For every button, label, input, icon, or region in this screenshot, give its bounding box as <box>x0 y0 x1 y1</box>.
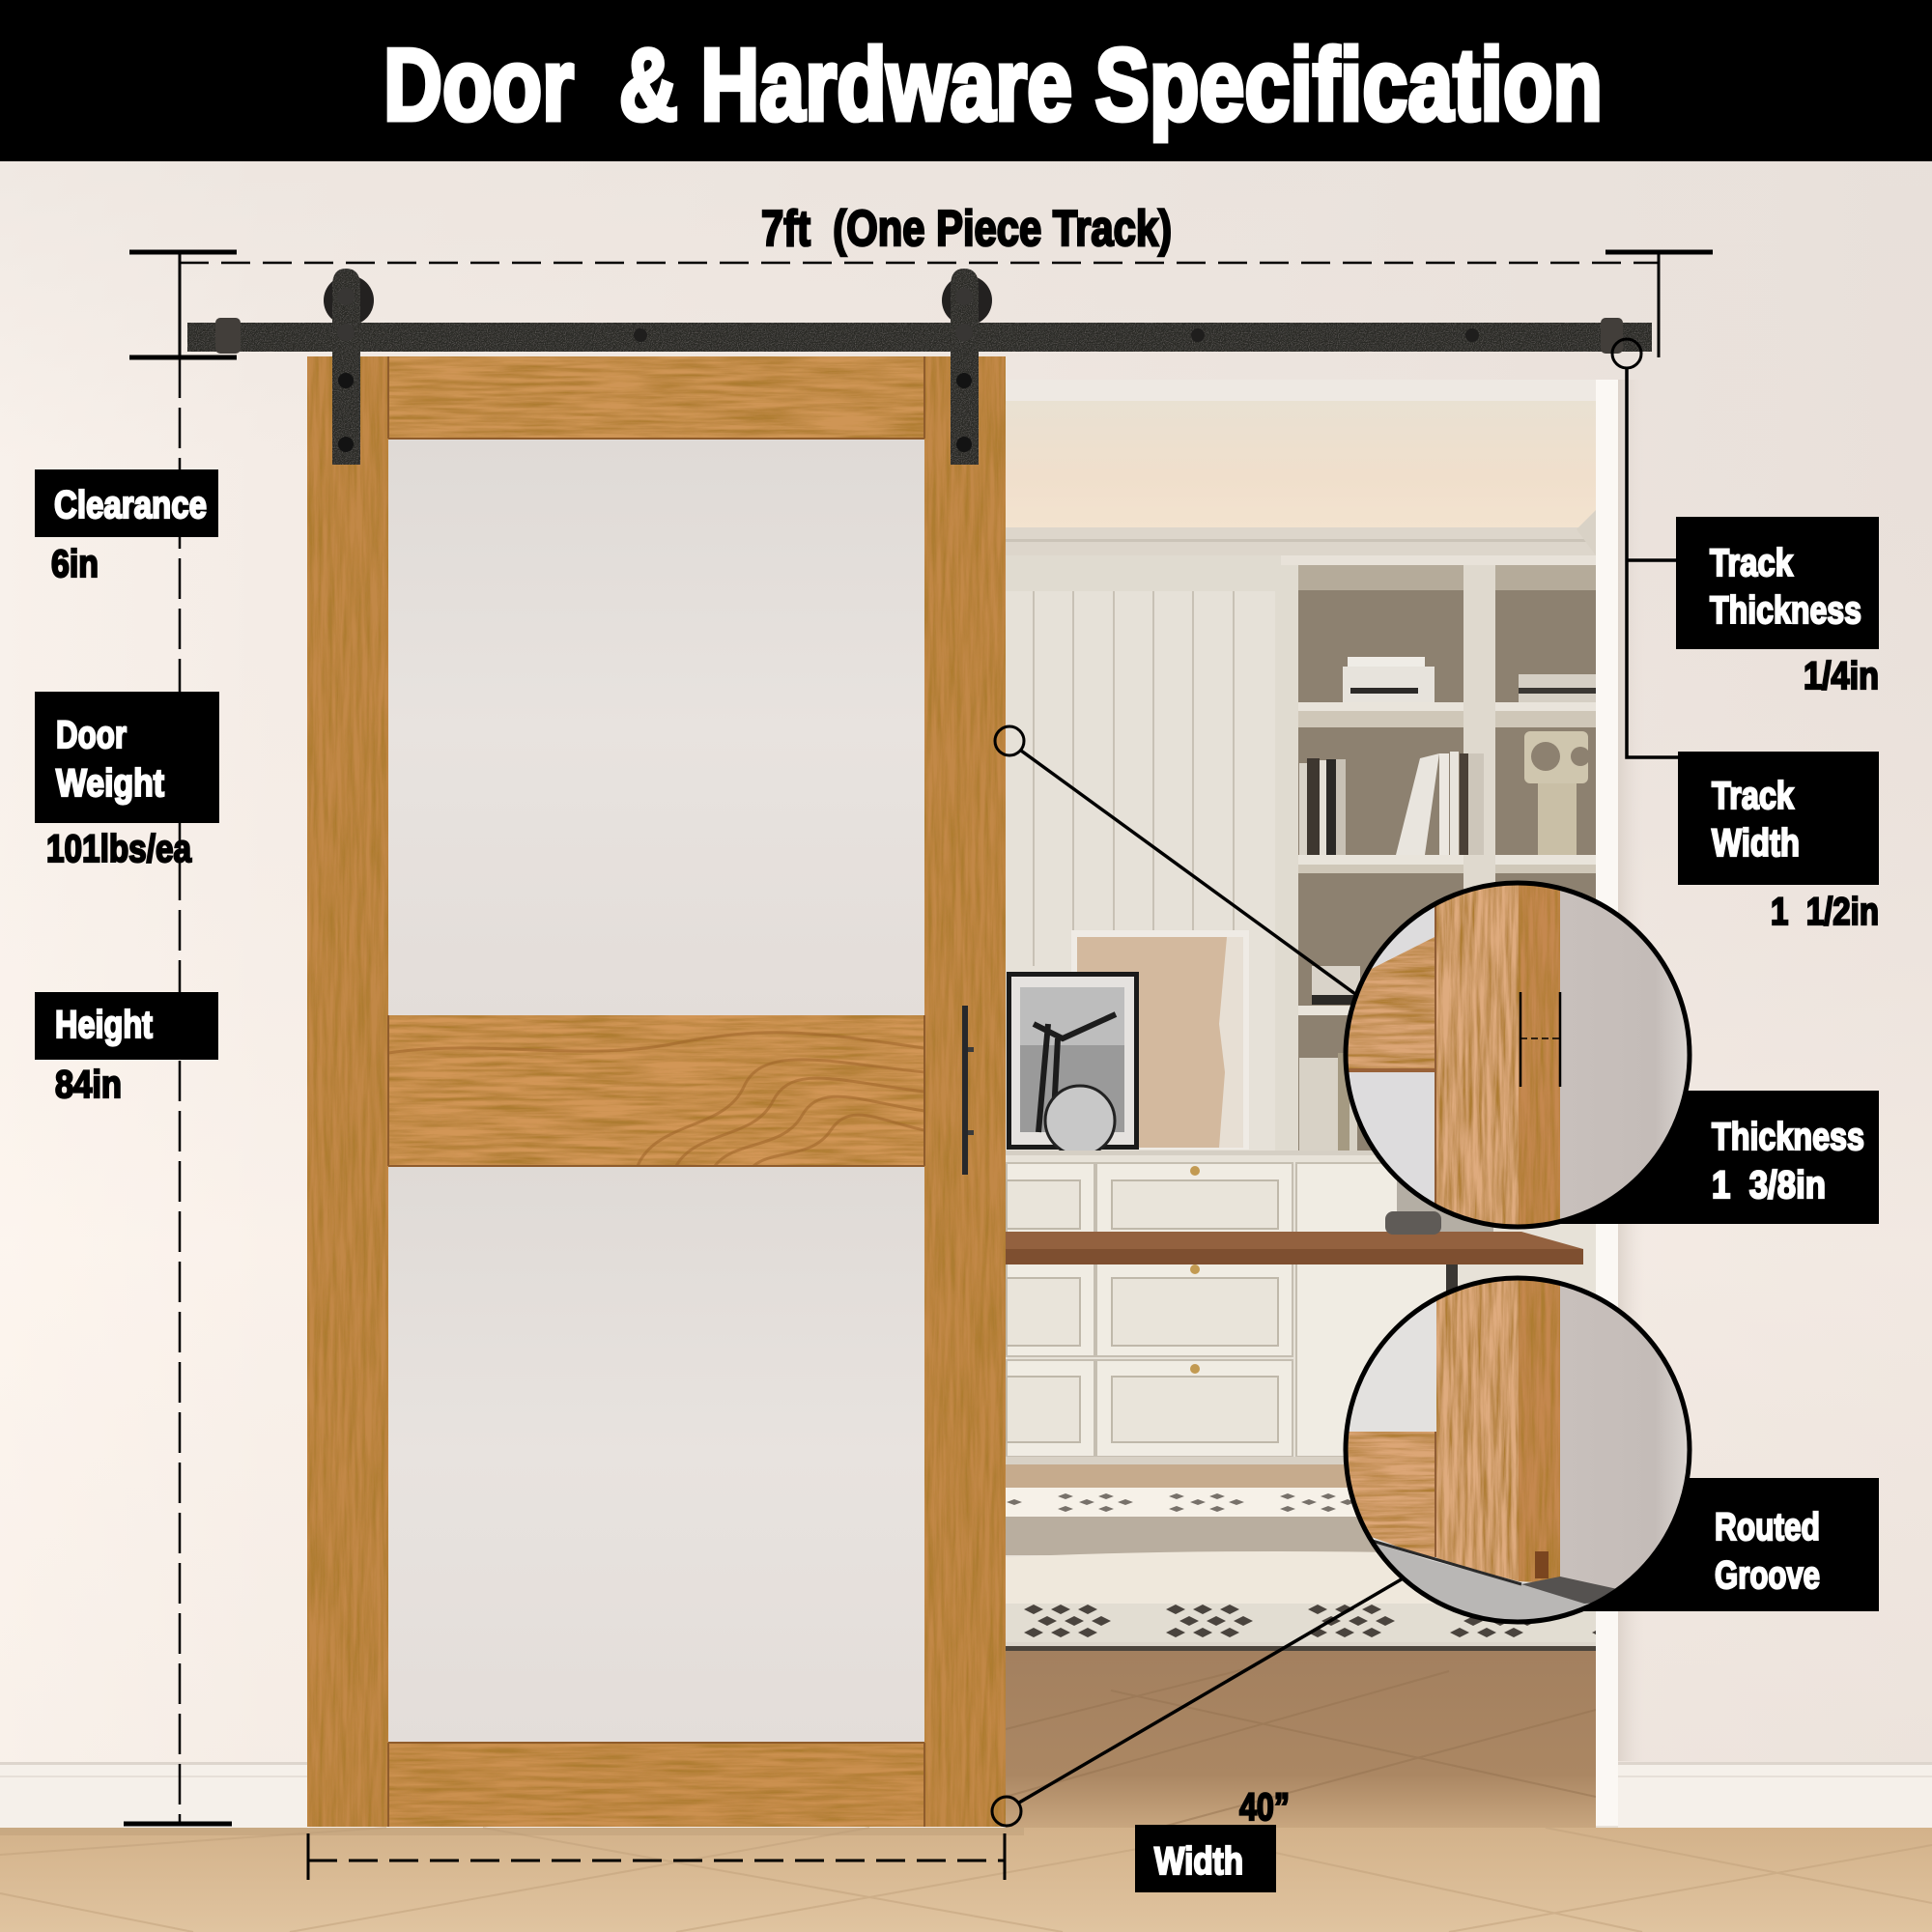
label: width: Width <box>1154 1840 1243 1883</box>
books <box>1299 657 1596 1151</box>
leader to thickness detail <box>995 726 1355 994</box>
label: routed groove: Groove <box>1715 1554 1820 1597</box>
label: door weight: Weight <box>56 762 164 805</box>
left hanger <box>324 269 374 465</box>
label: track width: Track <box>1712 775 1795 817</box>
label: thickness: Thickness <box>1712 1116 1864 1158</box>
label: track width: 1 1/2in <box>1771 891 1879 933</box>
label: track thickness: Thickness <box>1710 589 1861 632</box>
room seen through the opening <box>1006 380 1645 1828</box>
label: clearance: Clearance <box>54 484 207 526</box>
door stiles <box>307 356 1006 1827</box>
cathedral grain on middle rail <box>388 1033 924 1166</box>
label: clearance <box>35 469 218 585</box>
label: track thickness <box>1676 517 1879 697</box>
leader to groove detail <box>992 1577 1405 1826</box>
framed art: bicycle photo <box>1007 972 1139 1155</box>
label: routed groove: Routed <box>1715 1506 1820 1548</box>
label: door weight: Door <box>56 714 127 756</box>
crown molding <box>1006 510 1596 555</box>
label: door weight <box>35 692 219 870</box>
thickness marks <box>1520 992 1560 1087</box>
label: routed groove <box>1584 1478 1879 1611</box>
door opening trim <box>1006 380 1645 1826</box>
cabinets <box>1006 1151 1596 1464</box>
rug and interior floor <box>1006 1457 1596 1828</box>
magnifier: routed groove detail <box>1343 1275 1695 1633</box>
label: track width <box>1678 752 1879 933</box>
sculpture <box>1524 731 1590 855</box>
bookcase <box>1275 565 1596 1154</box>
height and clearance dimension line <box>124 252 232 1824</box>
track leader lines <box>1612 339 1678 757</box>
label: thickness: 1 3/8in <box>1712 1164 1826 1207</box>
label: track thickness: Track <box>1710 542 1794 584</box>
door rails <box>388 356 924 1827</box>
label: thickness <box>1557 1091 1879 1224</box>
wall panelling <box>1006 555 1281 1154</box>
barn door <box>307 356 1006 1827</box>
floor <box>0 1828 1932 1932</box>
width dimension line <box>308 1833 1005 1880</box>
desk <box>1006 1211 1583 1293</box>
pull handle <box>962 1006 974 1175</box>
label: width: 40” <box>1239 1786 1290 1829</box>
right hanger <box>942 269 992 465</box>
label: height: Height <box>55 1004 153 1046</box>
title bar <box>0 0 1932 161</box>
label: track thickness: 1/4in <box>1804 655 1879 697</box>
label: width <box>1135 1786 1290 1892</box>
framed art: watercolor <box>1071 930 1249 1150</box>
label: clearance: 6in <box>51 543 99 585</box>
label: track width: Width <box>1712 822 1800 865</box>
baseboards <box>0 1762 1932 1828</box>
title: Door & Hardware Specification <box>384 28 1603 142</box>
glass panels <box>386 439 927 1746</box>
label: height <box>35 992 218 1106</box>
label: height: 84in <box>55 1064 122 1106</box>
label: door weight: 101lbs/ea <box>46 828 192 870</box>
magnifier: door thickness detail <box>1343 879 1695 1232</box>
track rail <box>187 318 1652 354</box>
track length dimension: 7ft (One Piece Track) <box>761 201 1172 257</box>
ceiling glow <box>1006 401 1596 527</box>
track length dimension <box>129 201 1713 357</box>
